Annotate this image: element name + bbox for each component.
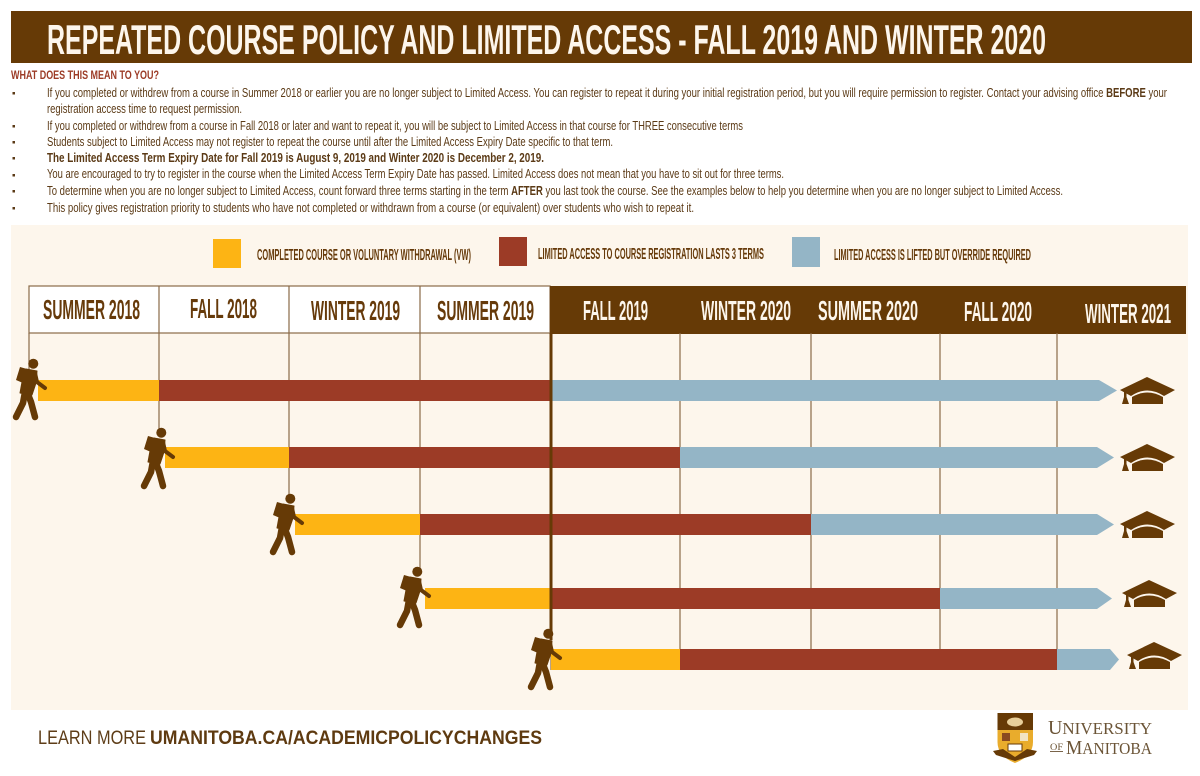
icon: graduation cap 2 xyxy=(1120,444,1175,471)
legend: LIMITED ACCESS TO COURSE REGISTRATION LASTS 3 TERMS xyxy=(538,246,764,263)
legend xyxy=(213,237,1031,268)
icon: crest xyxy=(993,713,1037,763)
icon: student walking 5 xyxy=(531,629,560,687)
university of manitoba logo: OF xyxy=(1050,742,1063,752)
term header row: FALL 2020 xyxy=(964,296,1032,327)
legend: completed course xyxy=(213,239,471,268)
university of manitoba logo xyxy=(993,713,1153,763)
icon: graduation cap 4 xyxy=(1122,580,1177,607)
learn more link: LEARN MORE xyxy=(38,728,146,749)
term header row: WINTER 2019 xyxy=(311,295,400,326)
legend: limited access xyxy=(499,237,764,266)
policy bullet list: The Limited Access Term Expiry Date for Fall 2019 is August 9, 2019 and Winter 2020 is December 2, 2019. xyxy=(47,151,544,165)
icon: student walking 1 xyxy=(16,359,45,417)
icon: graduation cap 5 xyxy=(1127,642,1182,669)
icon: student walking 3 xyxy=(273,494,302,552)
policy bullet list: You are encouraged to try to register in the course when the Limited Access Term Expiry Date has passed. Limited Access does not mean that you have to sit out for three terms. xyxy=(47,167,784,181)
limited access expiry line xyxy=(550,333,552,640)
legend: override required xyxy=(792,237,1031,267)
learn more link: UMANITOBA.CA/ACADEMICPOLICYCHANGES xyxy=(150,728,542,749)
policy bullet list: This policy gives registration priority to students who have not completed or withdrawn from a course (or equivalent) over students who wish to repeat it. xyxy=(47,201,694,215)
term header row: SUMMER 2020 xyxy=(818,295,918,326)
policy bullet list: To determine when you are no longer subject to Limited Access, count forward three terms starting in the term AFTER you last took the course. See the examples below to help you determine when you are no longer subject to Limited Access. xyxy=(47,184,1063,198)
timeline row 2 xyxy=(165,447,1114,468)
timeline row 1 xyxy=(38,380,1117,401)
icon: graduation cap 1 xyxy=(1120,377,1175,404)
panel: timeline background xyxy=(11,225,1188,710)
policy bullet list: registration access time to request permission. xyxy=(47,102,242,116)
legend: COMPLETED COURSE OR VOLUNTARY WITHDRAWAL (VW) xyxy=(257,247,471,264)
icon: graduation cap 3 xyxy=(1120,511,1175,538)
timeline row 3 xyxy=(295,514,1114,535)
term header row: WINTER 2020 xyxy=(701,295,791,326)
policy bullet list xyxy=(12,86,1167,215)
term header row: SUMMER 2019 xyxy=(437,295,534,326)
term header row: SUMMER 2018 xyxy=(43,294,140,325)
term header row xyxy=(29,286,1186,334)
icon: student walking 4 xyxy=(400,567,429,625)
term header row: FALL 2018 xyxy=(190,293,257,324)
policy bullet list: Students subject to Limited Access may not register to repeat the course until after the Limited Access Expiry Date specific to that term. xyxy=(47,135,613,149)
timeline row 4 xyxy=(425,588,1112,609)
policy bullet list: If you completed or withdrew from a course in Fall 2018 or later and want to repeat it, you will be subject to Limited Access in that course for THREE consecutive terms xyxy=(47,119,743,133)
icon: student walking 2 xyxy=(144,428,173,486)
university of manitoba logo: MANITOBA xyxy=(1066,737,1153,759)
heading: what does this mean to you: WHAT DOES THIS MEAN TO YOU? xyxy=(11,68,159,82)
timeline row 5 xyxy=(551,649,1119,670)
term header row: FALL 2019 xyxy=(583,295,648,326)
university of manitoba logo: UNIVERSITY xyxy=(1048,717,1152,739)
